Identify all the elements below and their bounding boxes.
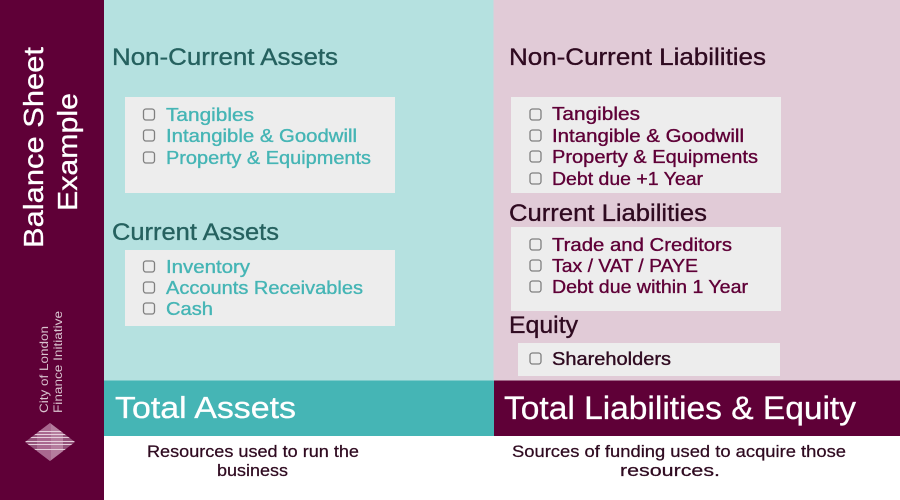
checkbox xyxy=(530,260,541,271)
text: assets description: Resources used to run the xyxy=(147,442,359,461)
panel: total liabilities and equity: Total Liabilities & Equity xyxy=(504,390,856,426)
checkbox xyxy=(144,303,154,314)
icon: logo diamond xyxy=(25,423,75,461)
item: Tangibles xyxy=(166,105,254,125)
organisation name xyxy=(37,311,65,413)
checkbox xyxy=(144,152,154,163)
list: non-current liabilities xyxy=(511,97,781,193)
panel: assets xyxy=(104,0,494,380)
list: current liabilities xyxy=(511,227,781,311)
item: Tangibles xyxy=(552,104,640,124)
text: liabilities description: resources. xyxy=(620,461,720,480)
item: Trade and Creditors xyxy=(552,235,732,255)
text: assets description: business xyxy=(217,461,288,480)
heading: equity: Equity xyxy=(509,312,578,339)
organisation name: Finance Initiative xyxy=(51,311,65,413)
checkbox xyxy=(530,130,541,141)
sidebar title: Balance Sheet xyxy=(18,47,49,248)
panel: total assets: Total Assets xyxy=(115,390,296,425)
item: Inventory xyxy=(166,257,250,277)
checkbox xyxy=(144,282,154,293)
sidebar title: Example xyxy=(52,93,83,211)
checkbox xyxy=(530,173,541,184)
checkbox xyxy=(530,353,541,364)
heading: non-current liabilities: Non-Current Liabilities xyxy=(509,44,766,71)
list: non-current assets xyxy=(125,97,395,193)
item: Intangible & Goodwill xyxy=(552,126,744,146)
panel: liabilities and equity xyxy=(494,0,900,380)
heading: current assets: Current Assets xyxy=(112,219,279,246)
item: Accounts Receivables xyxy=(166,278,363,298)
text: liabilities description: Sources of funding used to acquire those xyxy=(512,442,846,461)
organisation name: City of London xyxy=(37,326,51,413)
checkbox xyxy=(530,281,541,292)
item: Property & Equipments xyxy=(552,147,758,167)
item: Shareholders xyxy=(552,349,671,369)
item: Debt due within 1 Year xyxy=(552,277,748,297)
item: Debt due +1 Year xyxy=(552,169,703,189)
checkbox xyxy=(144,109,154,120)
heading: non-current assets: Non-Current Assets xyxy=(112,44,338,71)
checkbox xyxy=(530,239,541,250)
text: liabilities description xyxy=(512,442,846,480)
checkbox xyxy=(530,109,541,120)
sidebar title xyxy=(18,47,83,248)
text: assets description xyxy=(147,442,359,480)
item: Property & Equipments xyxy=(166,148,371,168)
panel: total assets xyxy=(104,380,494,436)
checkbox xyxy=(144,261,154,272)
checkbox xyxy=(530,151,541,162)
heading: current liabilities: Current Liabilities xyxy=(509,200,707,227)
item: Cash xyxy=(166,299,213,319)
item: Intangible & Goodwill xyxy=(166,126,357,146)
list: current assets xyxy=(125,250,395,326)
checkbox xyxy=(144,130,154,141)
panel: sidebar xyxy=(0,0,104,500)
panel: total liabilities and equity xyxy=(494,380,900,436)
list: equity xyxy=(518,343,780,376)
item: Tax / VAT / PAYE xyxy=(552,256,698,276)
